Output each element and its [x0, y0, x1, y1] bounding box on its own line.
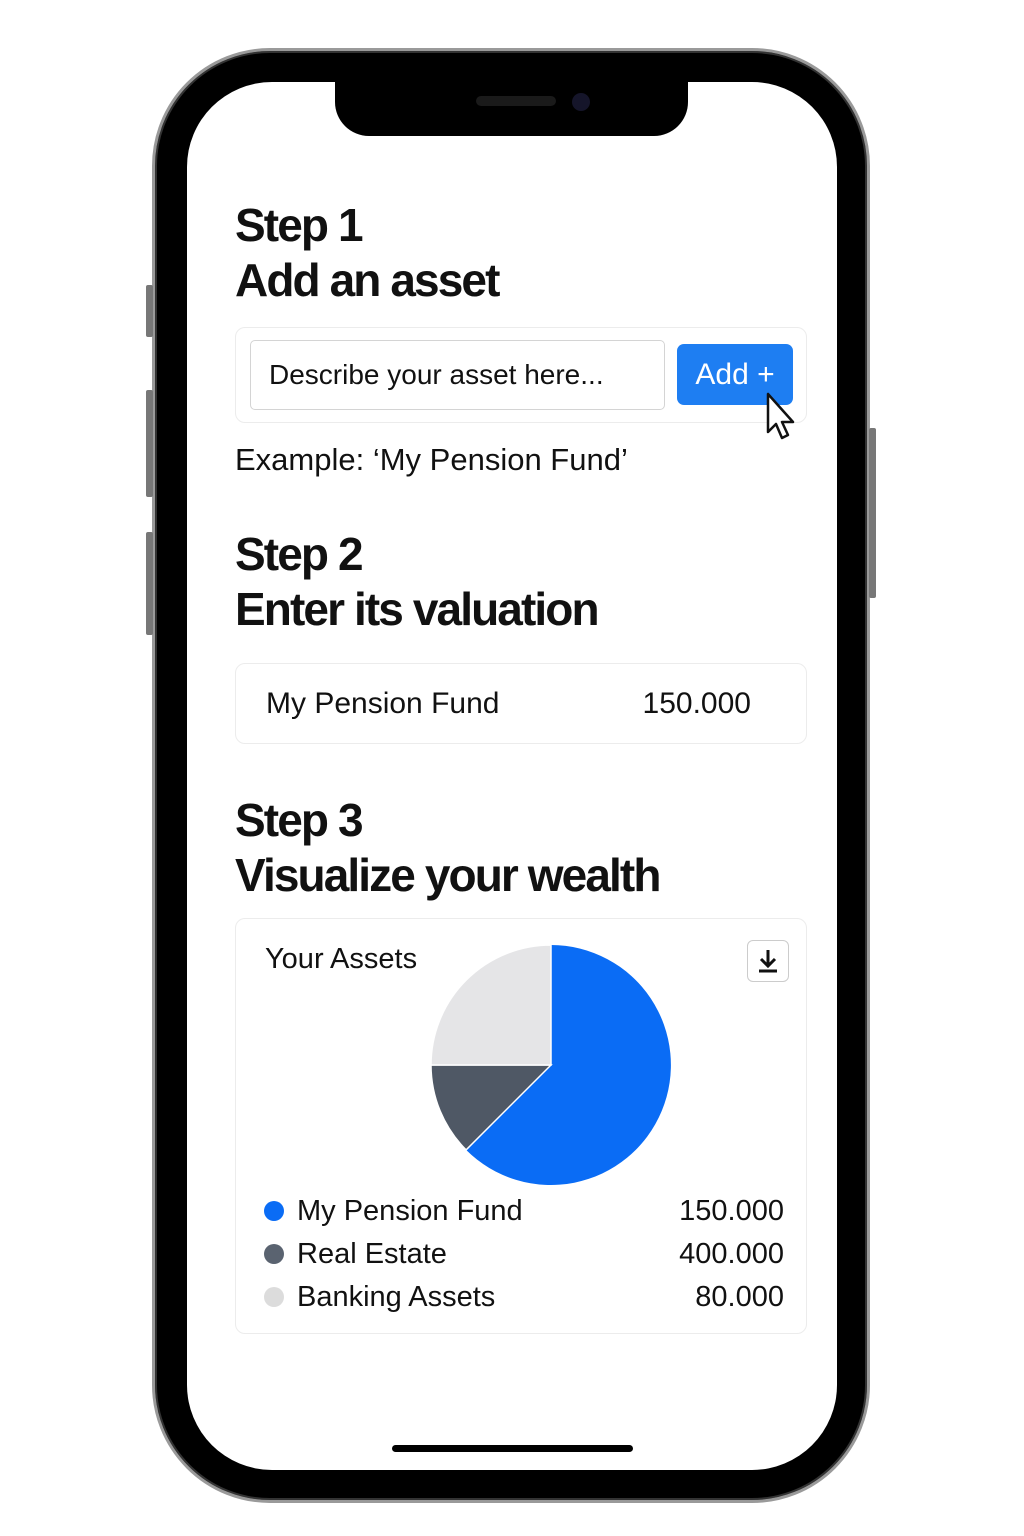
heading: step 2: Enter its valuation — [235, 583, 598, 635]
icon: download — [747, 940, 789, 982]
chart title: Your Assets — [265, 943, 417, 975]
heading: step 1: Add an asset — [235, 254, 499, 306]
legend — [264, 1195, 784, 1313]
heading: step 3 — [235, 794, 660, 901]
icon: cursor — [766, 392, 794, 440]
add button — [677, 344, 793, 405]
legend: 400.000 — [679, 1238, 784, 1270]
input field — [250, 340, 665, 410]
heading: step 3: Visualize your wealth — [235, 849, 660, 901]
pie chart — [432, 945, 671, 1185]
heading: step 2 — [235, 528, 598, 635]
speaker — [476, 96, 556, 106]
example text: Example: ‘My Pension Fund’ — [235, 442, 628, 477]
heading: step 2: Step 2 — [235, 528, 362, 580]
heading: step 3: Step 3 — [235, 794, 362, 846]
phone frame — [152, 48, 870, 1503]
add button: Add + — [695, 358, 775, 391]
panel: asset input — [235, 327, 807, 423]
heading: step 1: Step 1 — [235, 199, 362, 251]
panel: chart — [235, 918, 807, 1334]
panel: valuation: My Pension Fund — [266, 687, 499, 720]
legend: My Pension Fund — [297, 1195, 523, 1227]
legend: Banking Assets — [297, 1281, 495, 1313]
heading: step 1 — [235, 199, 500, 306]
home indicator — [392, 1445, 633, 1452]
screen — [187, 82, 837, 1470]
panel: valuation: 150.000 — [643, 687, 751, 720]
input field: Describe your asset here... — [269, 359, 604, 390]
camera — [572, 93, 590, 111]
legend: 150.000 — [679, 1195, 784, 1227]
legend: Real Estate — [297, 1238, 447, 1270]
panel: valuation — [235, 663, 807, 744]
notch — [335, 80, 688, 136]
side buttons — [146, 285, 153, 337]
legend: 80.000 — [695, 1281, 784, 1313]
